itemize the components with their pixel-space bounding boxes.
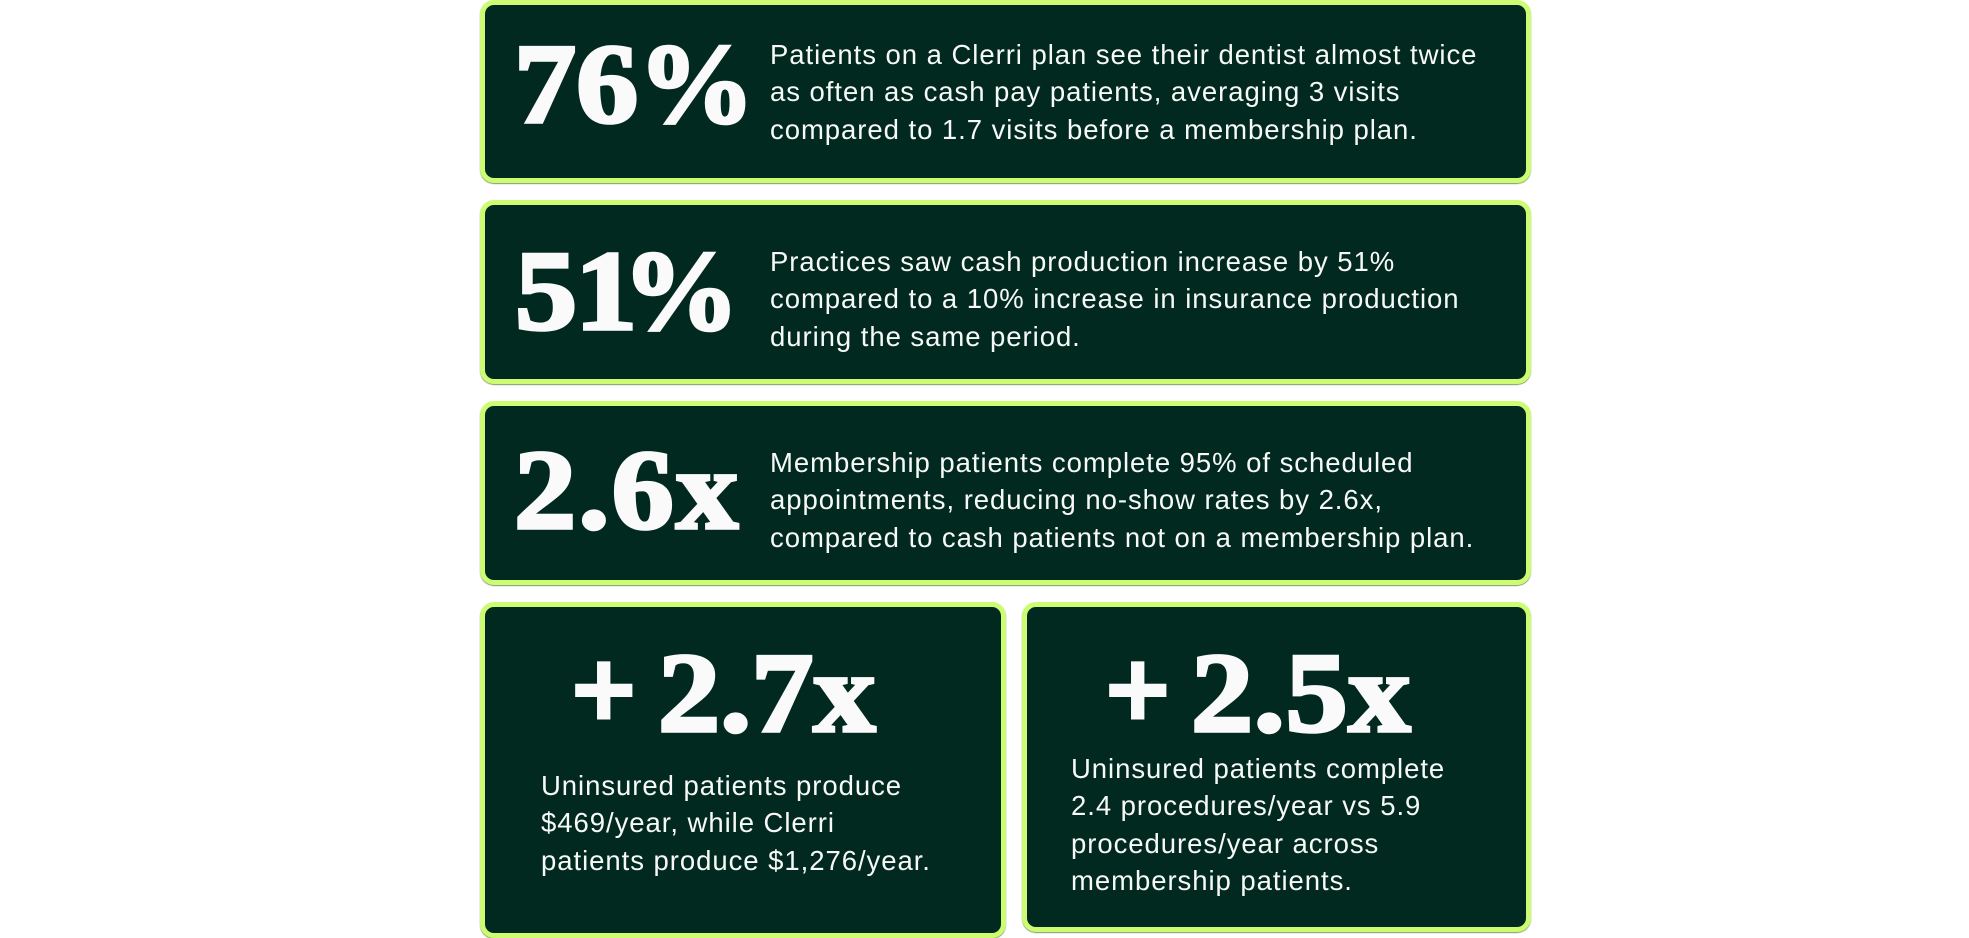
- text: +2.5x description: membership patients.: [1071, 865, 1353, 896]
- text: 76% description: compared to 1.7 visits before a membership plan.: [770, 114, 1418, 145]
- stat: 76%: [514, 22, 755, 147]
- text: +2.7x description: Uninsured patients produce: [541, 770, 902, 801]
- panel: 76% stat: [480, 0, 1531, 183]
- text: 2.6x description: [770, 447, 1474, 553]
- text: +2.7x description: patients produce $1,276/year.: [541, 845, 931, 876]
- text: 51% description: during the same period.: [770, 321, 1081, 352]
- stat: 51%: [515, 229, 739, 354]
- text: +2.5x description: [1071, 753, 1445, 896]
- text: 51% description: [770, 246, 1460, 352]
- text: +2.5x description: procedures/year across: [1071, 828, 1379, 859]
- stat: 2.7x: 2.7x: [658, 631, 876, 756]
- text: 2.6x description: appointments, reducing no-show rates by 2.6x,: [770, 484, 1383, 515]
- text: 2.6x description: Membership patients complete 95% of scheduled: [770, 447, 1414, 478]
- stat: 51%: 51: [515, 229, 637, 354]
- icon: plus sign: +: [571, 627, 636, 752]
- panel: 2.6x stat: [480, 401, 1531, 585]
- text: 51% description: compared to a 10% increase in insurance production: [770, 283, 1460, 314]
- text: +2.7x description: $469/year, while Clerri: [541, 807, 835, 838]
- text: 51% description: Practices saw cash production increase by 51%: [770, 246, 1395, 277]
- text: 76% description: as often as cash pay patients, averaging 3 visits: [770, 76, 1400, 107]
- text: +2.7x description: [541, 770, 931, 876]
- panel: +2.5x stat: [1022, 602, 1531, 932]
- stat: 76%: 76: [514, 22, 638, 147]
- text: +2.5x description: 2.4 procedures/year vs 5.9: [1071, 790, 1421, 821]
- stat: 51%: %: [623, 229, 739, 354]
- stat: 2.6x: 2.6x: [514, 428, 740, 553]
- panel: +2.7x stat: [480, 602, 1006, 938]
- panel: 51% stat: [480, 200, 1531, 384]
- stat: 76%: %: [638, 22, 755, 147]
- text: 76% description: [770, 39, 1477, 145]
- text: +2.5x description: Uninsured patients complete: [1071, 753, 1445, 784]
- stat: 2.5x: 2.5x: [1191, 631, 1411, 756]
- icon: plus sign: +: [1105, 627, 1170, 752]
- text: 2.6x description: compared to cash patients not on a membership plan.: [770, 522, 1474, 553]
- text: 76% description: Patients on a Clerri plan see their dentist almost twice: [770, 39, 1477, 70]
